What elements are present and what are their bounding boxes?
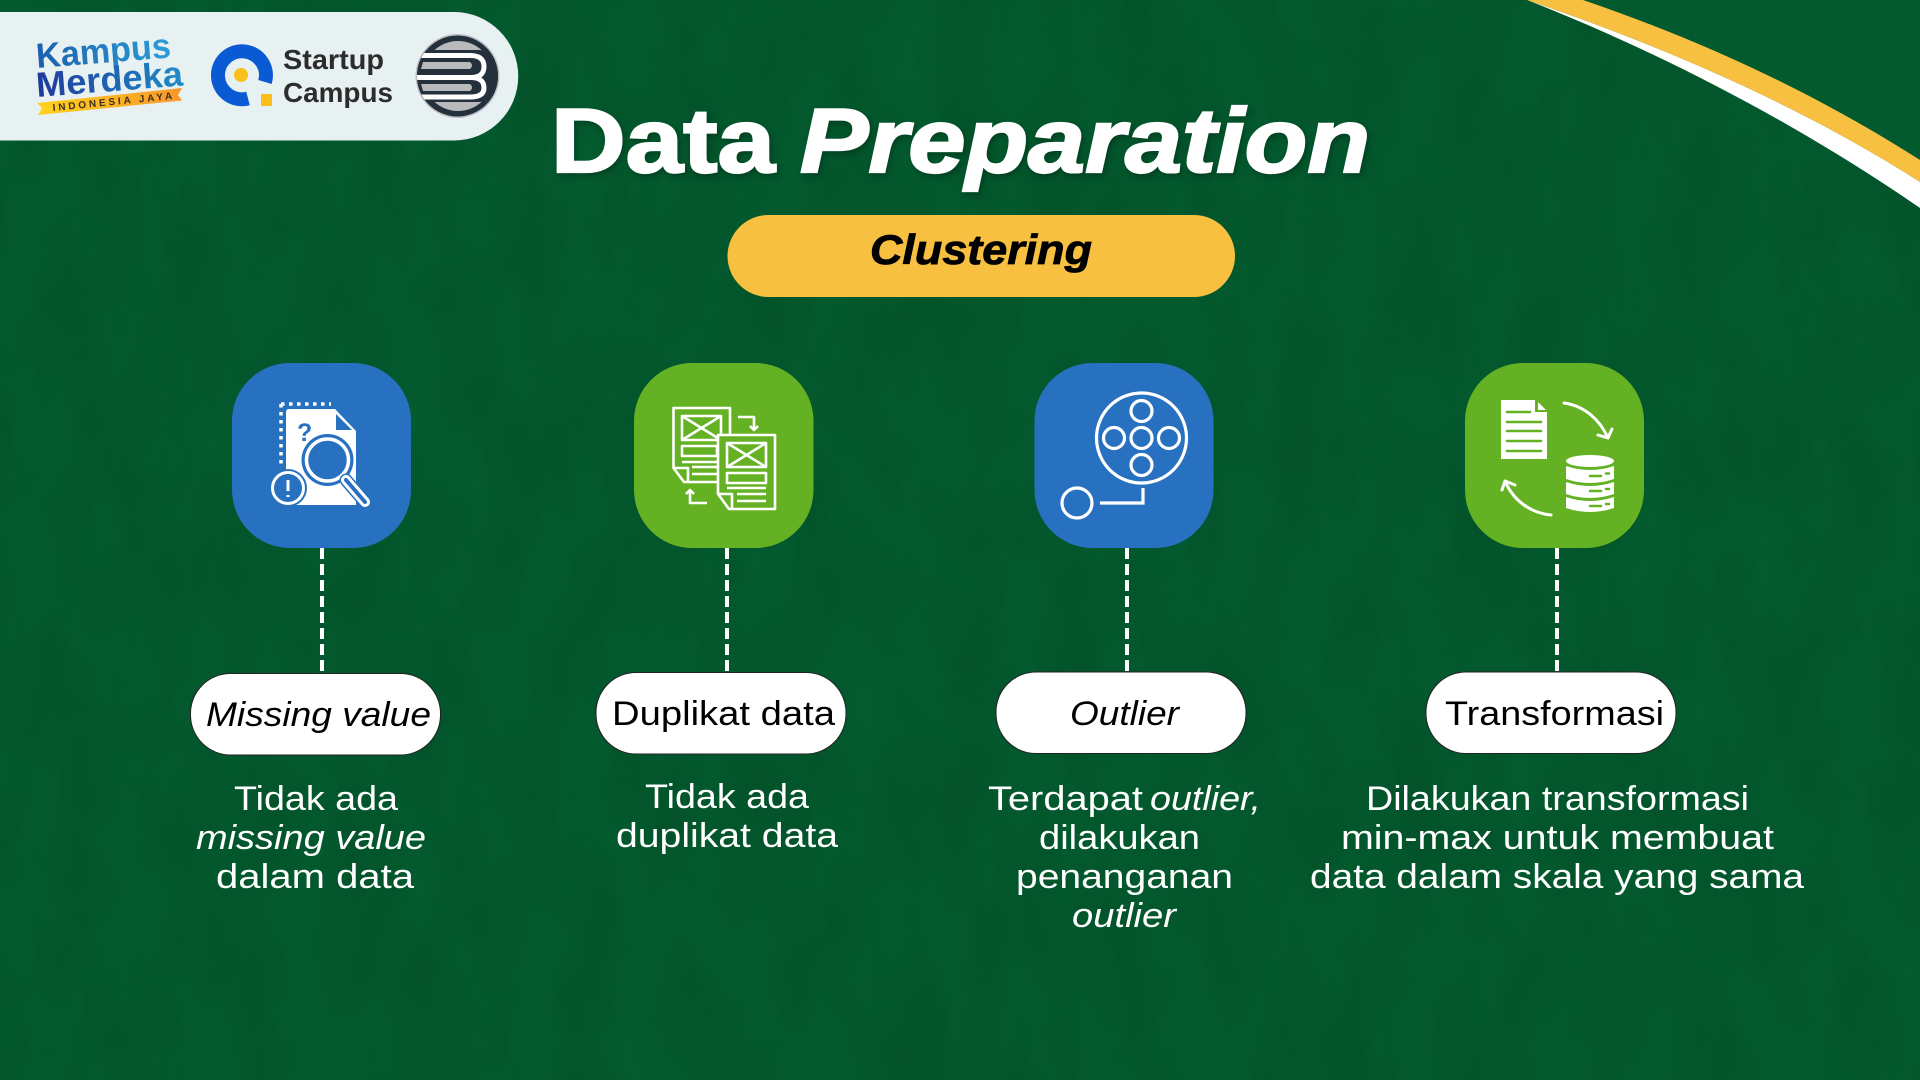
logo: Startup Campus	[218, 44, 393, 108]
logo bar	[0, 12, 518, 140]
label pill: Transformasi: Transformasi	[1445, 695, 1664, 733]
icon tile: missing value: ?	[297, 419, 312, 447]
label pill: Duplikat data: Duplikat data	[612, 695, 835, 733]
subtitle pill: Clustering: Clustering	[870, 226, 1092, 273]
corner swoosh: yellow and white curve	[1527, 0, 1920, 208]
icon tile: missing value	[232, 363, 411, 548]
logo: B emblem	[414, 34, 504, 118]
description: outlier: outlier	[1072, 897, 1178, 935]
icon tile: outlier	[1034, 363, 1214, 548]
description: transformasi: min-max untuk membuat	[1341, 819, 1775, 857]
description: outlier: outlier,	[1150, 780, 1261, 818]
description: duplikat data: duplikat data	[616, 817, 838, 855]
description: missing value	[196, 780, 426, 896]
label pill: Missing value	[190, 674, 440, 755]
logo: Kampus Merdeka	[35, 27, 185, 115]
connector: transformasi	[1555, 548, 1559, 672]
title	[551, 91, 1370, 192]
description: transformasi	[1310, 780, 1804, 896]
label pill: Missing value: Missing value	[206, 696, 431, 734]
logo: Startup Campus: Startup	[283, 44, 384, 75]
description: duplikat data: Tidak ada	[645, 778, 809, 816]
title: Data	[551, 91, 777, 192]
subtitle pill: Clustering	[728, 215, 1235, 297]
label pill: Duplikat data	[596, 672, 846, 754]
label pill: Outlier: Outlier	[1070, 695, 1181, 733]
description: outlier: Terdapat	[988, 780, 1144, 818]
description: missing value: dalam data	[216, 858, 414, 896]
logo: Kampus Merdeka: INDONESIA JAYA	[52, 91, 173, 114]
connector: missing value	[320, 548, 324, 674]
label pill: Outlier	[996, 672, 1246, 754]
description: outlier	[988, 780, 1261, 935]
logo: Kampus Merdeka: Merdeka	[35, 55, 185, 105]
description: transformasi: Dilakukan transformasi	[1366, 780, 1749, 818]
connector: outlier	[1125, 548, 1129, 672]
connector: duplikat data	[725, 548, 729, 673]
description: outlier: dilakukan	[1039, 819, 1200, 857]
icon tile: duplikat data	[634, 363, 814, 548]
icon tile: transformasi	[1465, 363, 1644, 548]
description: duplikat data	[616, 778, 838, 855]
description: transformasi: data dalam skala yang sama	[1310, 858, 1804, 896]
title: Preparation	[800, 91, 1370, 192]
logo: Kampus Merdeka: Kampus	[35, 27, 172, 76]
label pill: Transformasi	[1426, 672, 1676, 754]
description: missing value: Tidak ada	[234, 780, 398, 818]
description: outlier: penanganan	[1016, 858, 1233, 896]
description: missing value: missing value	[196, 819, 426, 857]
logo: Startup Campus: Campus	[283, 77, 393, 108]
